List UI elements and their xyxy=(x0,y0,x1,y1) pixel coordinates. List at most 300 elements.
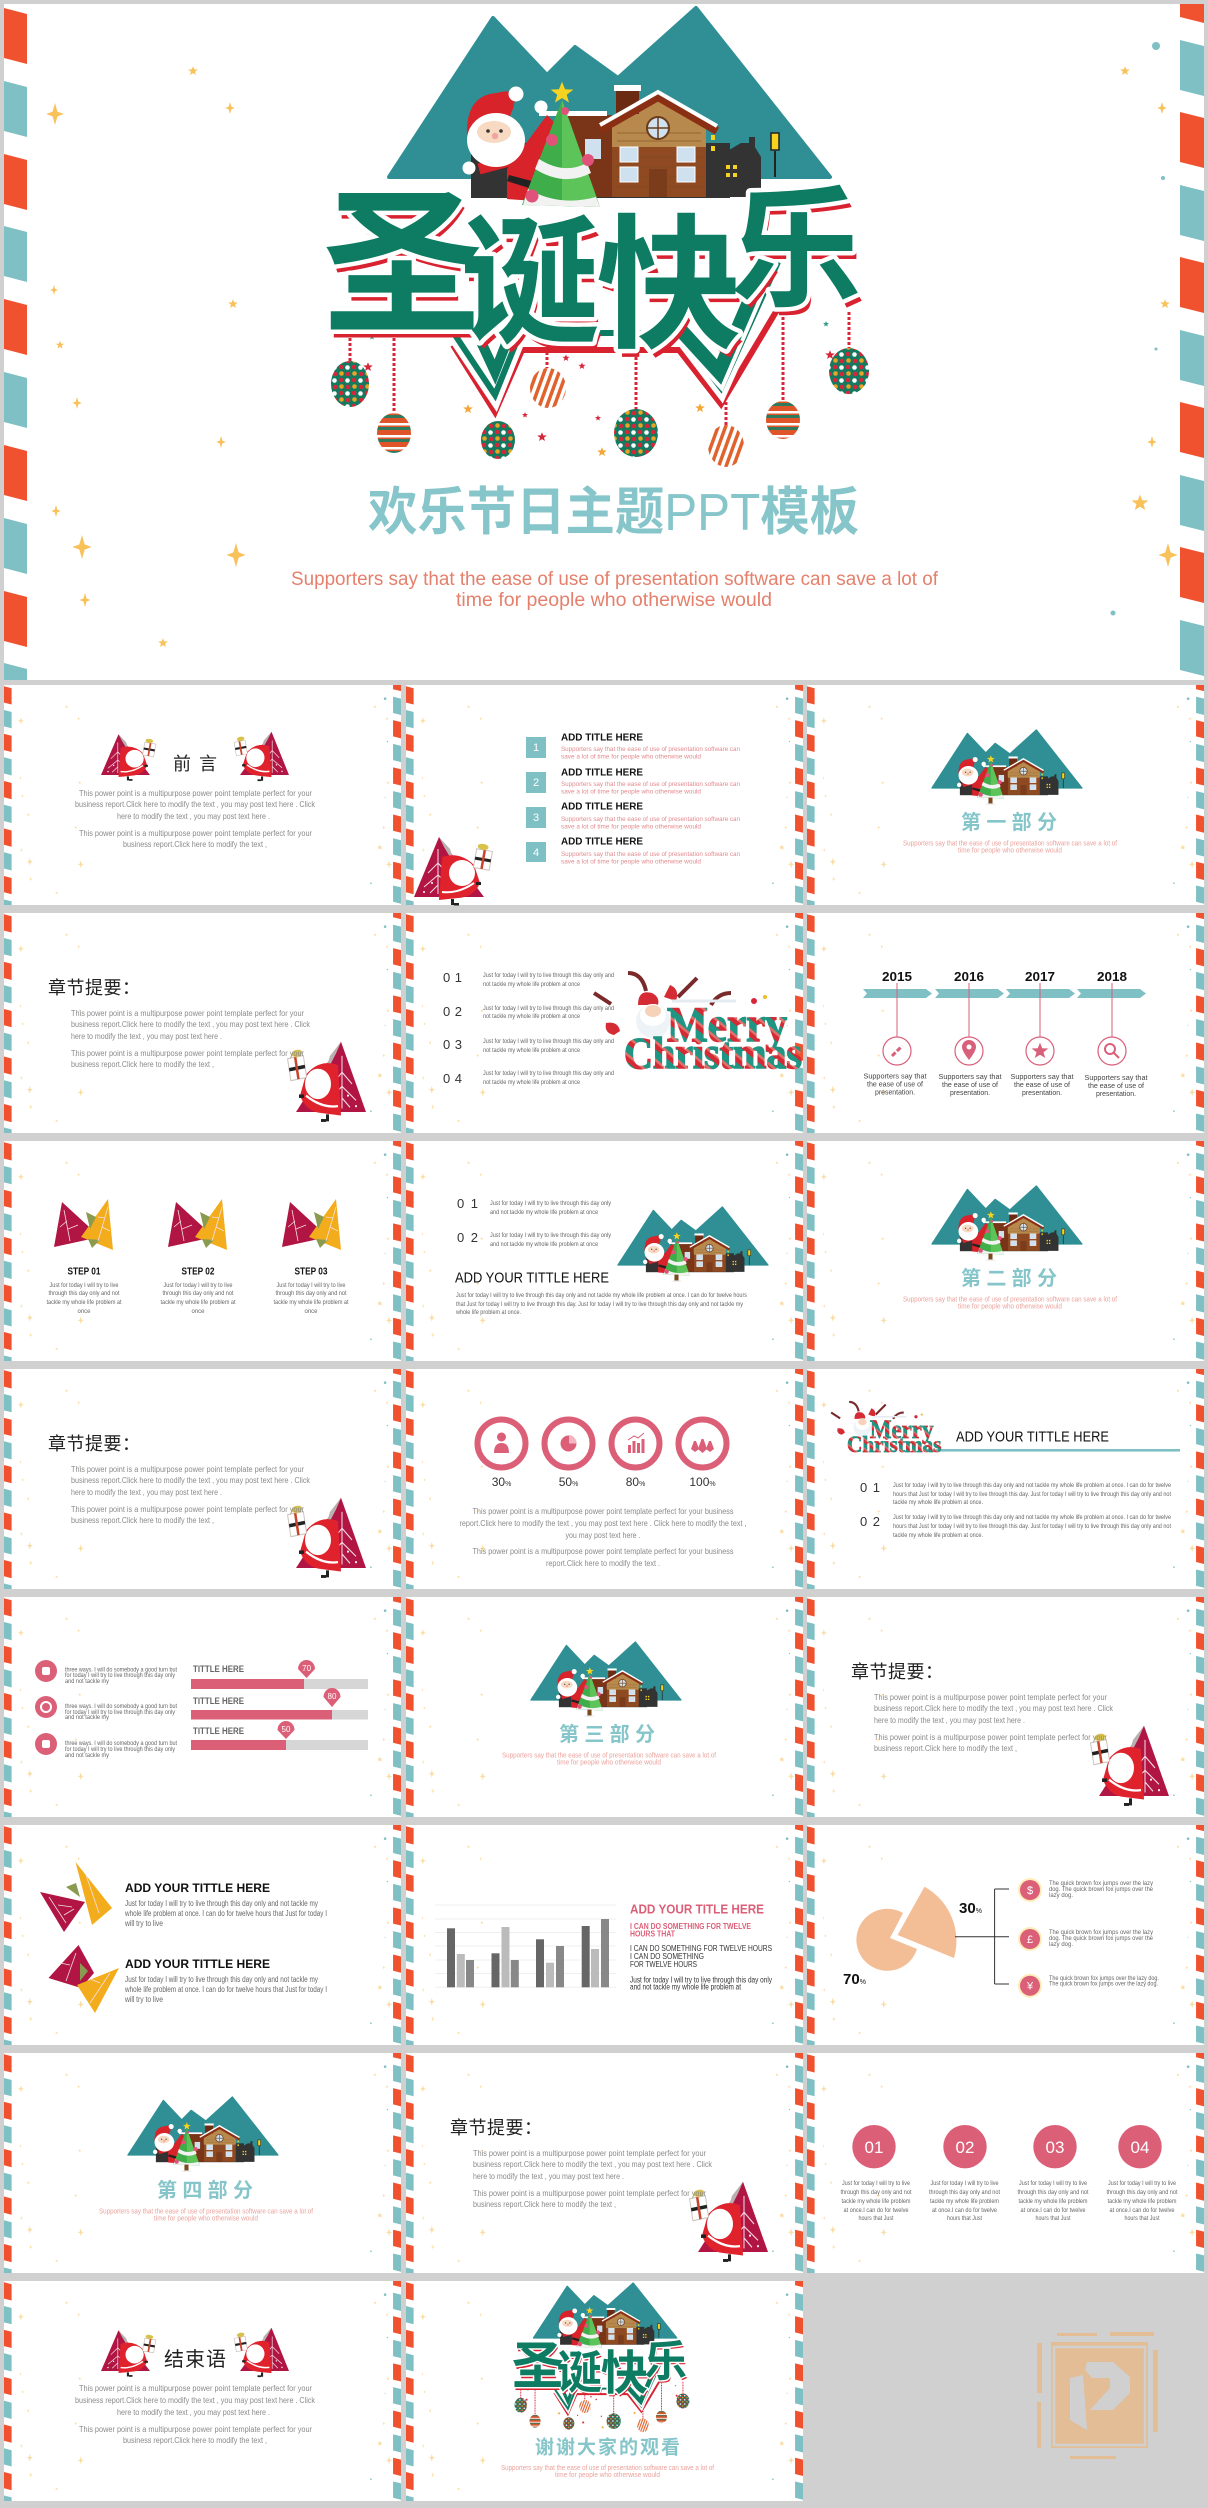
progress bar 80: TITTLE HERE xyxy=(193,1696,244,1706)
title: 圣诞快乐: 圣 xyxy=(322,176,482,355)
illustration: Merry Christmas lettering xyxy=(831,1402,941,1458)
step 2: Just for today I will try to live xyxy=(164,1283,233,1289)
numbers: 0 2 xyxy=(443,1004,462,1019)
item 3: and not tackle my xyxy=(65,1753,109,1759)
panel: percentage rings slide xyxy=(406,1357,803,1602)
contents item 1 xyxy=(526,732,740,760)
milestone 2016: 2016 xyxy=(954,969,984,984)
contents item 4: 4 xyxy=(533,847,539,859)
ring 80% xyxy=(612,1420,660,1489)
progress bar 50: 50 xyxy=(282,1725,291,1734)
caption: Supporters say that the ease of use of presentation software can save a lot of xyxy=(99,2208,313,2216)
text block: I CAN DO SOMETHING FOR TWELVE HOURS xyxy=(630,1944,772,1953)
column 03: tackle my whole life problem xyxy=(1018,2199,1088,2205)
text block: This power point is a multipurpose power point template perfect for your xyxy=(71,1009,304,1018)
title: 圣诞快乐: 圣 xyxy=(325,184,485,363)
text block: Just for today I will try to live through this day only and xyxy=(483,1039,614,1045)
item pound: The quick brown fox jumps over the lazy xyxy=(1049,1930,1153,1936)
list text: and not tackle my whole life problem at once xyxy=(490,1242,599,1248)
column 01: tackle my whole life problem xyxy=(842,2199,910,2205)
text block: you may post text here . xyxy=(566,1531,640,1540)
item yen: ¥ xyxy=(1026,1981,1034,1993)
icon: stamp logo watermark xyxy=(1037,2332,1158,2459)
item text 1: will try to live xyxy=(124,1919,163,1928)
numbers: 0 3 xyxy=(443,1037,462,1052)
illustration: Merry Christmas lettering: Merry xyxy=(667,996,787,1052)
milestone 2015: Supporters say that xyxy=(864,1074,927,1080)
text block: here to modify the text , you may post text here . xyxy=(71,1032,222,1041)
text block: here to modify the text , you may post text here . xyxy=(117,2408,270,2417)
text block: This power point is a multipurpose power point template perfect for your xyxy=(71,1505,304,1514)
text block: business report.Click here to modify the text , you may post text here . Click xyxy=(874,1704,1114,1713)
illustration: Merry Christmas lettering: Merry xyxy=(870,1414,933,1444)
item 3: three ways. I will do somebody a good turn but xyxy=(65,1741,177,1747)
icon: lower triangle pair xyxy=(48,1945,119,2013)
step 1: once xyxy=(78,1309,91,1315)
milestone 2018 xyxy=(1084,969,1148,1098)
text block: here to modify the text , you may post text here . xyxy=(71,1488,222,1497)
heading: 前 言 xyxy=(173,754,217,774)
numbers: 0 1 xyxy=(443,970,462,985)
caption: time for people who otherwise would xyxy=(154,2216,258,2222)
contents item 2: save a lot of time for people who otherwise would xyxy=(561,788,701,796)
item heading 2: ADD YOUR TITTLE HERE xyxy=(125,1957,270,1971)
text block: not tackle my whole life problem at once xyxy=(483,982,581,988)
text block: tackle my whole life problem at once. xyxy=(893,1500,983,1506)
numbers: 0 4 xyxy=(443,1071,462,1086)
contents item 1: Supporters say that the ease of use of presentation software can xyxy=(561,746,740,753)
caption: Supporters say that the ease of use of presentation software can save a lot of xyxy=(903,840,1117,848)
caption: time for people who otherwise would xyxy=(557,1760,661,1766)
icon: Santa and triangle tree xyxy=(689,2182,768,2262)
title: 圣诞快乐: 乐 xyxy=(734,185,866,332)
text block: This power point is a multipurpose power point template perfect for your xyxy=(79,829,312,838)
zigzag title strokes xyxy=(453,258,783,412)
caption xyxy=(501,2465,714,2479)
contents item 2: Supporters say that the ease of use of presentation software can xyxy=(561,781,740,788)
column 02: Just for today I will try to live xyxy=(930,2181,999,2187)
progress bar 80 xyxy=(191,1688,368,1720)
caption: time for people who otherwise would xyxy=(958,1304,1062,1310)
column 02: at once.I can do for twelve xyxy=(932,2208,998,2214)
text block: business report.Click here to modify the text , xyxy=(874,1744,1017,1753)
text block: Just for today I will try to live through this day only and not tackle my whole life problem at once. I can do for twelve hours xyxy=(456,1293,747,1299)
item heading 1: ADD YOUR TITTLE HERE xyxy=(125,1881,270,1895)
item 1: for today I will try to live through this day only xyxy=(65,1673,175,1679)
item dollar: The quick brown fox jumps over the lazy xyxy=(1049,1881,1153,1887)
column 01: Just for today I will try to live xyxy=(842,2181,911,2187)
text block: business report.Click here to modify the text , xyxy=(123,840,267,849)
item pound xyxy=(1018,1927,1154,1951)
ring 30%: 30% xyxy=(492,1475,511,1489)
text block: This power point is a multipurpose power point template perfect for your xyxy=(874,1693,1107,1702)
milestone 2018: Supporters say that xyxy=(1084,1075,1148,1082)
panel: four numbered circles slide xyxy=(807,2041,1204,2286)
title: 圣诞快乐: 诞 xyxy=(460,205,600,362)
item text 1 xyxy=(124,1899,327,1928)
ring 50%: 50% xyxy=(559,1475,578,1489)
contents item 3: save a lot of time for people who otherwise would xyxy=(561,824,701,830)
column 02: 02 xyxy=(956,2138,974,2157)
caption: time for people who otherwise would xyxy=(958,848,1062,854)
illustration: title artwork: 乐 xyxy=(644,2339,687,2387)
item 1: and not tackle my xyxy=(65,1679,109,1685)
icon: Santa and triangle tree left xyxy=(101,734,157,781)
column 04 xyxy=(1106,2125,1178,2222)
contents item 3: Supporters say that the ease of use of presentation software can xyxy=(561,816,740,823)
progress bar 50: TITTLE HERE xyxy=(193,1726,244,1736)
text block: This power point is a multipurpose power point template perfect for your xyxy=(874,1733,1107,1742)
text block: Just for today I will try to live through this day only xyxy=(630,1976,772,1984)
pie chart xyxy=(856,1887,956,1971)
title: 圣诞快乐: 快 xyxy=(596,205,741,367)
subheading xyxy=(630,1922,752,1938)
heading: ADD YOUR TITTLE HERE xyxy=(455,1270,609,1286)
panel: chapter summary slide 4 xyxy=(406,2041,803,2286)
text block: Just for today I will try to live through this day only and xyxy=(483,1071,614,1077)
illustration: title artwork xyxy=(512,2283,689,2432)
panel: pie chart slide xyxy=(807,1813,1204,2058)
step 3: tackle my whole life problem at xyxy=(274,1300,349,1306)
contents item 1: 1 xyxy=(533,742,539,754)
milestone 2018: 2018 xyxy=(1097,969,1127,984)
illustration: title artwork: 诞 xyxy=(558,2350,603,2401)
item 2: and not tackle my xyxy=(65,1715,109,1721)
item 1 xyxy=(35,1660,177,1685)
contents item 2: ADD TITLE HERE xyxy=(561,768,643,778)
illustration: scene xyxy=(618,1207,768,1282)
panel: chapter summary slide 2 xyxy=(4,1357,401,1602)
step 2: tackle my whole life problem at xyxy=(160,1300,236,1306)
pie labels: 70% xyxy=(843,1971,866,1988)
illustration: scene xyxy=(128,2097,278,2172)
text block: FOR TWELVE HOURS xyxy=(630,1960,697,1969)
illustration: mountains, Santa, tree and house xyxy=(389,8,830,207)
text block: business report.Click here to modify the text , xyxy=(71,1516,214,1525)
text block: here to modify the text , you may post text here . xyxy=(874,1716,1025,1725)
contents item 2: 2 xyxy=(533,777,539,789)
column 03: 03 xyxy=(1046,2138,1064,2157)
text block xyxy=(473,2149,713,2209)
column 03: through this day only and not xyxy=(1018,2190,1089,2196)
caption xyxy=(502,1752,716,1766)
text block xyxy=(71,1009,311,1069)
text block: whole life problem at once. xyxy=(455,1310,521,1316)
milestone 2016 xyxy=(938,969,1002,1097)
title: 圣诞快乐: 圣 xyxy=(322,176,482,355)
numbers xyxy=(443,970,462,1086)
heading: ADD YOUR TITTLE HERE xyxy=(956,1430,1109,1446)
contents item 2 xyxy=(526,768,740,796)
text block: and not tackle my whole life problem at xyxy=(630,1982,742,1992)
heading: 章节提要： xyxy=(851,1662,943,1682)
panel: triangle pairs slide xyxy=(4,1813,401,2058)
text block: Just for today I will try to live through this day only and xyxy=(483,973,614,979)
connector lines xyxy=(955,1889,1009,1984)
illustration: title artwork: 乐 xyxy=(644,2339,687,2387)
panel: section two slide xyxy=(807,1129,1204,1374)
pie labels xyxy=(843,1900,982,1988)
contents item 4: Supporters say that the ease of use of presentation software can xyxy=(561,851,740,858)
rule under heading xyxy=(924,1449,1180,1452)
illustration: Merry Christmas lettering: Christmas xyxy=(847,1432,941,1458)
step 3: STEP 03 xyxy=(294,1266,328,1278)
column 02: hours that Just xyxy=(947,2216,982,2222)
item dollar: $ xyxy=(1027,1885,1033,1897)
icon: upper triangle pair xyxy=(40,1862,112,1932)
illustration: title artwork: 诞 xyxy=(557,2347,602,2398)
text block: here to modify the text , you may post text here . xyxy=(117,812,270,821)
caption: Supporters say that the ease of use of presentation software can save a lot of xyxy=(291,569,939,590)
illustration: title artwork: 乐 xyxy=(646,2341,688,2389)
timeline arrows xyxy=(863,989,1146,998)
list text: Just for today I will try to live through this day only xyxy=(490,1201,611,1207)
contents item 3: ADD TITLE HERE xyxy=(561,802,643,812)
column 04: hours that Just xyxy=(1124,2216,1160,2222)
caption: Supporters say that the ease of use of presentation software can save a lot of xyxy=(502,1752,716,1760)
caption xyxy=(99,2208,313,2222)
icon: Santa and triangle tree left xyxy=(101,2330,157,2377)
title: 圣诞快乐: 诞 xyxy=(464,213,604,370)
item pound: lazy dog. xyxy=(1049,1942,1073,1948)
text block: business report.Click here to modify the text , you may post text here . Click xyxy=(473,2160,713,2169)
heading: 章节提要： xyxy=(48,978,140,998)
text block: report.Click here to modify the text . xyxy=(546,1559,660,1568)
text block: hours that Just for today I will try to live through this day. Just for today I will try to live through this day only and not xyxy=(893,1524,1171,1530)
icon: Santa and triangle tree xyxy=(1090,1726,1169,1806)
caption xyxy=(903,1296,1117,1310)
text block: here to modify the text , you may post text here . xyxy=(473,2172,624,2181)
heading: 第 四 部 分 xyxy=(157,2179,253,2202)
illustration: title artwork: 圣 xyxy=(512,2339,564,2397)
contents item 1: save a lot of time for people who otherwise would xyxy=(561,754,701,760)
panel: Merry Christmas heading slide xyxy=(807,1357,1204,1602)
column 01: through this day only and not xyxy=(840,2190,912,2196)
milestone 2016: the ease of use of xyxy=(942,1082,998,1089)
numbers: 0 2 xyxy=(860,1514,880,1529)
icon: Santa and triangle tree right xyxy=(233,732,289,781)
text block: This power point is a multipurpose power point template perfect for your xyxy=(473,2149,706,2158)
progress bar 50 xyxy=(191,1721,368,1750)
pie labels: 30% xyxy=(959,1900,982,1917)
subtitle: 欢乐节日主题PPT模板 xyxy=(368,484,859,542)
text block: This power point is a multipurpose power point template perfect for your xyxy=(71,1465,304,1474)
item dollar xyxy=(1018,1878,1154,1902)
item yen xyxy=(1018,1974,1159,1998)
numbers xyxy=(457,1196,478,1245)
ring 80%: 80% xyxy=(626,1475,645,1489)
column 02 xyxy=(929,2125,1000,2222)
text block: business report.Click here to modify the text , xyxy=(473,2200,616,2209)
progress bar 70 xyxy=(191,1660,368,1689)
item pound: £ xyxy=(1027,1934,1033,1946)
step 3: through this day only and not xyxy=(276,1291,347,1297)
text block: that Just for today I will try to live through this day. Just for today I will try to live through this day only and not tackle my xyxy=(456,1302,743,1308)
contents item 3 xyxy=(526,802,740,830)
panel: progress bars slide xyxy=(4,1585,401,1830)
item text 2: will try to live xyxy=(124,1995,163,2004)
caption xyxy=(291,569,939,611)
illustration: Merry Christmas lettering: Christmas xyxy=(624,1029,802,1078)
milestone 2015: 2015 xyxy=(882,969,912,984)
progress bar 70: TITTLE HERE xyxy=(193,1664,244,1674)
panel: cover slide xyxy=(4,0,1204,719)
text block: not tackle my whole life problem at once xyxy=(483,1080,581,1086)
title: 圣诞快乐: 诞 xyxy=(460,205,600,362)
step 1: through this day only and not xyxy=(48,1291,120,1297)
panel: three steps slide xyxy=(4,1129,401,1374)
bar chart xyxy=(435,1905,616,1987)
column 04: at once.I can do for twelve xyxy=(1110,2208,1175,2214)
contents item 4 xyxy=(526,836,740,866)
panel: chapter summary slide 1 xyxy=(4,901,401,1146)
column 03: at once.I can do for twelve xyxy=(1020,2208,1086,2214)
numbers xyxy=(860,1480,880,1529)
item text 1: Just for today I will try to live through this day only and not tackle my xyxy=(125,1899,318,1908)
illustration: title artwork: 快 xyxy=(602,2349,649,2402)
subheading: HOURS THAT xyxy=(630,1930,675,1938)
milestone 2017 xyxy=(1010,969,1074,1097)
illustration: title artwork: 诞 xyxy=(557,2347,602,2398)
step 1: Just for today I will try to live xyxy=(50,1283,119,1289)
milestone 2016: presentation. xyxy=(950,1090,990,1097)
text block: not tackle my whole life problem at once xyxy=(483,1014,581,1020)
column 04: tackle my whole life problem xyxy=(1108,2199,1176,2205)
step 1: STEP 01 xyxy=(68,1266,101,1278)
progress bar 80: 80 xyxy=(328,1692,337,1701)
text block: Just for today I will try to live through this day only and not tackle my whole life problem at once. I can do for twelve xyxy=(893,1483,1172,1489)
icon: Santa and triangle tree right xyxy=(233,2328,289,2377)
title: 圣诞快乐: 快 xyxy=(600,213,745,375)
text block: business report.Click here to modify the text , you may post text here . Click xyxy=(75,2396,316,2405)
caption: Supporters say that the ease of use of presentation software can save a lot of xyxy=(501,2465,714,2472)
contents item 4: ADD TITLE HERE xyxy=(561,836,643,848)
heading: 第 一 部 分 xyxy=(961,811,1057,834)
panel: foreword slide xyxy=(4,673,401,918)
icon: Santa and triangle tree xyxy=(287,1042,366,1122)
item pound: dog. The quick brown fox jumps over the xyxy=(1049,1936,1154,1942)
text block xyxy=(630,1944,772,1992)
panel: numbered list with Merry Christmas xyxy=(406,901,803,1146)
column 03 xyxy=(1018,2125,1089,2222)
step 1 xyxy=(46,1199,122,1315)
milestone 2017: presentation. xyxy=(1022,1090,1062,1097)
illustration: title artwork: 圣 xyxy=(512,2339,564,2397)
item text 2: Just for today I will try to live through this day only and not tackle my xyxy=(125,1975,318,1984)
title: 圣诞快乐: 快 xyxy=(596,205,741,367)
column 01: hours that Just xyxy=(858,2216,894,2222)
item 2: for today I will try to live through this day only xyxy=(65,1710,175,1716)
step 2: STEP 02 xyxy=(182,1266,215,1278)
panel: thank-you slide xyxy=(406,2269,803,2508)
milestone 2017: the ease of use of xyxy=(1014,1082,1070,1089)
text block: report.Click here to modify the text , you may post text here . Click here to modify the text , xyxy=(460,1519,746,1528)
heading: ADD YOUR TITLE HERE xyxy=(630,1902,764,1916)
column 01 xyxy=(840,2125,912,2222)
text block: Just for today I will try to live through this day only and xyxy=(483,1006,614,1012)
text block: business report.Click here to modify the text , xyxy=(71,1060,214,1069)
text block: This power point is a multipurpose power point template perfect for your xyxy=(79,789,312,798)
item 2: three ways. I will do somebody a good turn but xyxy=(65,1704,177,1710)
text block: not tackle my whole life problem at once xyxy=(483,1048,581,1054)
text block xyxy=(483,973,614,1086)
icon: Santa and triangle tree xyxy=(414,837,493,906)
item yen: The quick brown fox jumps over the lazy dog. xyxy=(1049,1982,1158,1988)
item text 2 xyxy=(124,1975,327,2004)
text block: Just for today I will try to live through this day only and not tackle my whole life problem at once. I can do for twelve xyxy=(893,1515,1172,1521)
ring 100% xyxy=(678,1420,726,1489)
step 3: once xyxy=(304,1309,318,1315)
column 04: 04 xyxy=(1131,2138,1149,2157)
panel: bar chart slide xyxy=(406,1813,803,2058)
text block xyxy=(460,1507,746,1568)
item 3 xyxy=(35,1733,177,1759)
heading: 章节提要： xyxy=(450,2118,542,2138)
text block xyxy=(71,1465,311,1525)
text block: This power point is a multipurpose power point template perfect for your xyxy=(473,2189,706,2198)
heading: 第 三 部 分 xyxy=(559,1723,655,1746)
icon: Santa and triangle tree xyxy=(287,1498,366,1578)
text block xyxy=(874,1693,1114,1753)
column 04: through this day only and not xyxy=(1106,2190,1178,2196)
text block xyxy=(75,789,316,849)
text block: I CAN DO SOMETHING xyxy=(630,1952,704,1961)
column 03: Just for today I will try to live xyxy=(1019,2181,1088,2187)
illustration: title artwork: 快 xyxy=(601,2347,648,2400)
caption: time for people who otherwise would xyxy=(456,590,772,611)
text block: business report.Click here to modify the text , xyxy=(123,2436,267,2445)
panel: timeline slide xyxy=(807,901,1204,1146)
subheading: I CAN DO SOMETHING FOR TWELVE xyxy=(630,1922,752,1931)
text block: This power point is a multipurpose power point template perfect for your business xyxy=(472,1547,734,1556)
column 04: Just for today I will try to live xyxy=(1108,2181,1177,2187)
milestone 2015: the ease of use of xyxy=(867,1082,923,1088)
panel: two items with scene xyxy=(406,1129,803,1374)
milestone 2017: Supporters say that xyxy=(1010,1074,1074,1081)
caption: Supporters say that the ease of use of presentation software can save a lot of xyxy=(903,1296,1117,1304)
step 1: tackle my whole life problem at xyxy=(46,1300,122,1306)
column 02: tackle my whole life problem xyxy=(930,2199,999,2205)
list text: and not tackle my whole life problem at once xyxy=(490,1210,599,1216)
item text 1: whole life problem at once. I can do for twelve hours that Just for today I xyxy=(124,1909,327,1918)
text block: hours that Just for today I will try to live through this day. Just for today I will try to live through this day only and not xyxy=(893,1492,1171,1498)
milestone 2016: Supporters say that xyxy=(938,1074,1002,1081)
illustration: scene xyxy=(932,730,1082,805)
text block xyxy=(455,1293,747,1316)
title: 圣诞快乐: 乐 xyxy=(730,177,862,324)
heading: 第 二 部 分 xyxy=(961,1267,1057,1290)
item text 2: whole life problem at once. I can do for twelve hours that Just for today I xyxy=(124,1985,327,1994)
text block xyxy=(75,2384,316,2445)
item dollar: dog. The quick brown fox jumps over the xyxy=(1049,1887,1154,1893)
text block: This power point is a multipurpose power point template perfect for your xyxy=(79,2384,312,2393)
heading: 章节提要： xyxy=(48,1434,140,1454)
numbers: 0 2 xyxy=(457,1230,478,1245)
milestone 2018: presentation. xyxy=(1096,1091,1136,1098)
text block: business report.Click here to modify the text , you may post text here . Click xyxy=(71,1020,311,1029)
illustration: Merry Christmas lettering xyxy=(594,973,802,1078)
contents item 3: 3 xyxy=(533,812,539,824)
progress bar 70: 70 xyxy=(302,1664,312,1673)
caption xyxy=(903,840,1117,854)
text block: This power point is a multipurpose power point template perfect for your xyxy=(79,2425,312,2434)
panel: section four slide xyxy=(4,2041,401,2286)
text block: This power point is a multipurpose power point template perfect for your xyxy=(71,1049,304,1058)
step 2: once xyxy=(192,1309,205,1315)
panel: section three slide xyxy=(406,1585,803,1830)
milestone 2018: the ease of use of xyxy=(1088,1083,1144,1090)
step 2: through this day only and not xyxy=(162,1291,234,1297)
